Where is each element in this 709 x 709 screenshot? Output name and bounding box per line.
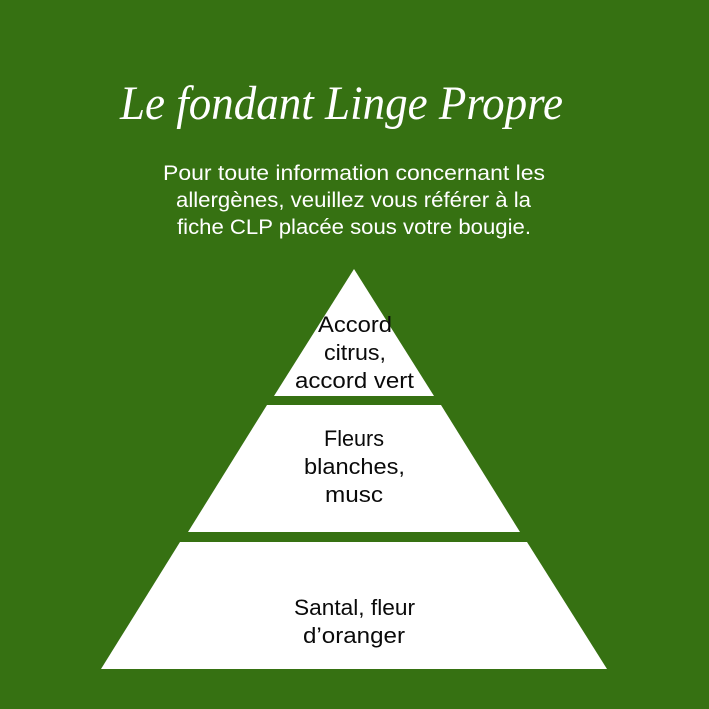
pyramid tier: heart notes (188, 405, 520, 532)
pyramid tier: top notes: accord vert (295, 368, 414, 393)
pyramid chart (101, 269, 607, 669)
title: Le fondant Linge Propre (119, 77, 563, 130)
pyramid tier: top notes (274, 269, 434, 396)
intro text block: allergènes, veuillez vous référer à la (176, 188, 531, 212)
pyramid tier: heart notes: musc (325, 482, 383, 507)
intro text block: Pour toute information concernant les (163, 161, 545, 185)
pyramid tier: heart notes: Fleurs (324, 426, 384, 451)
intro text block (163, 161, 545, 239)
pyramid tier: base notes: Santal, fleur (294, 595, 415, 620)
pyramid tier: base notes (101, 542, 607, 669)
intro text block: fiche CLP placée sous votre bougie. (177, 215, 531, 239)
pyramid tier: base notes: d’oranger (303, 623, 405, 648)
pyramid tier: top notes: citrus, (324, 340, 386, 365)
pyramid tier: top notes: Accord (318, 312, 392, 337)
pyramid tier: heart notes: blanches, (304, 454, 405, 479)
